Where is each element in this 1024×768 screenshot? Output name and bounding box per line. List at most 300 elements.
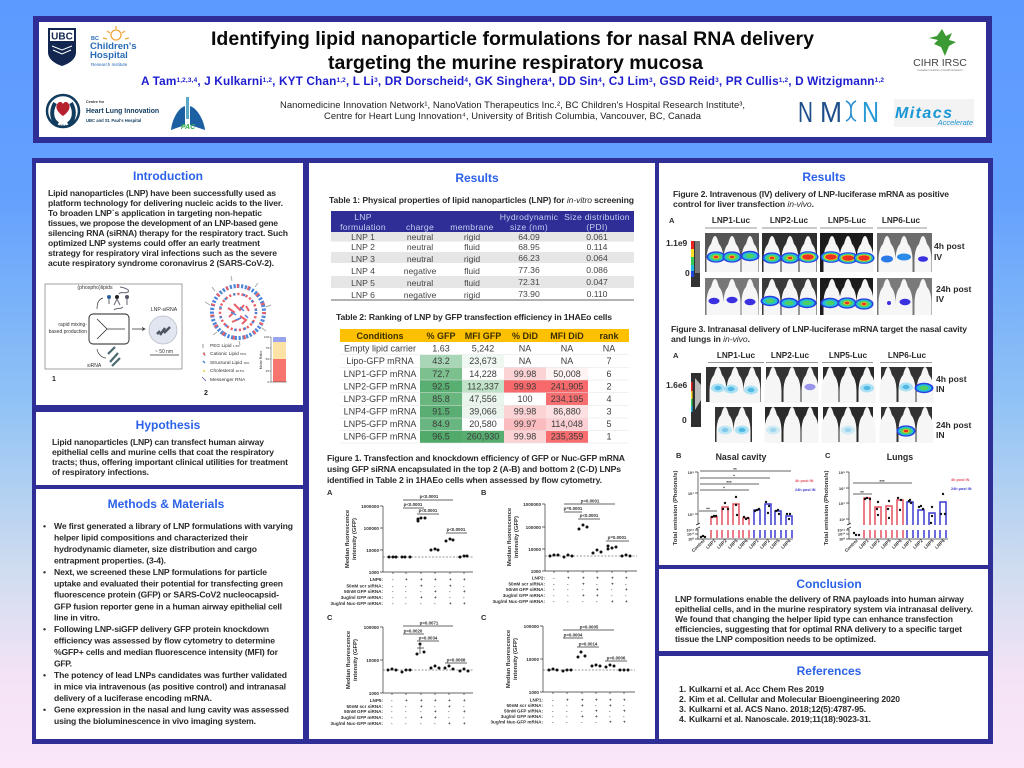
text: reference list: Kim et al. Cellular and Molecular Bioengineering 2020: [689, 694, 900, 704]
chart: nasal cavity: B: [676, 451, 682, 460]
chart: figure 1 B: 50nM GFP siRNA:: [506, 587, 545, 592]
table 1: fluid: [464, 278, 480, 288]
chart: figure 1 C (LNP1): 3ug/ml GFP mRNA:: [501, 714, 543, 719]
text: methods bullets: GFP fusion reporter gene in a human airway epithelial cell: [54, 601, 282, 611]
table 2: 99.93: [514, 382, 536, 392]
table 2: 99.98: [514, 432, 536, 442]
figure 2 bioluminescence images, 4h: [705, 233, 932, 272]
heading: results in vivo: Results: [802, 170, 846, 184]
logo: Heart Lung Innovation: [47, 95, 159, 128]
chart: figure 1 C (LNP1): [481, 613, 635, 724]
chart: figure 1 C (LNP1): p=0.0005: [580, 624, 599, 630]
text: introduction body: platform technology for delivering nucleic acids to the liver.: [48, 198, 283, 208]
text: conclusion body: tissue the LNP composition needs to be optimized.: [675, 634, 876, 644]
table 1: 68.95: [518, 242, 540, 252]
chart: lungs: 10⁵: [839, 501, 845, 506]
chart: figure 1 A: 100000: [364, 526, 379, 531]
table 2: Conditions: [356, 331, 404, 341]
figure 1 caption: Figure 1. Transfection and knockdown efficiency of GFP or Nuc-GFP mRNA: [327, 453, 625, 463]
text: methods bullets: %GFP+ cells and median fluorescence intensity (MFI) for: [54, 647, 279, 657]
chart: figure 1 C (LNP1): 50nM GFP siRNA:: [504, 708, 543, 714]
chart: nasal cavity: LNP5: [727, 538, 739, 550]
table 2: MFI GFP: [465, 331, 501, 341]
table 2: [340, 329, 629, 443]
chart: figure 1 C (LNP1): p=0.0004: [564, 632, 583, 638]
chart: figure 1 C (LNP5): 100000: [364, 625, 379, 630]
logo: CIHR: Canadian Institutes of Health Research: [917, 68, 963, 72]
table 2: 112,337: [467, 382, 499, 392]
table 1: 73.90: [518, 289, 540, 299]
chart: nasal cavity: 4h post IN: [795, 479, 814, 483]
chart: nasal cavity: 10⁷: [688, 491, 694, 496]
text: methods bullets: entrapment properties. (3-4).: [54, 555, 166, 565]
figure 3 time labels: IN: [936, 430, 945, 440]
table 1: fluid: [464, 242, 480, 252]
figure 2 time labels: [934, 241, 971, 304]
table 2: 6: [606, 369, 612, 379]
chart: figure 1 A: ---+-+: [392, 589, 466, 594]
chart: figure 1 C (LNP5): C: [327, 613, 333, 622]
panel: references: [659, 656, 988, 739]
text: methods bullets: delivery of a luciferase encoding mRNA.: [54, 693, 212, 703]
logo: Heart Lung Innovation: Heart Lung Innovation: [86, 108, 159, 115]
chart: nasal cavity: [673, 451, 816, 553]
table 2: 96.5: [432, 432, 450, 442]
figure: LNP structure with composition: 2: [204, 390, 208, 397]
figure 2 labels: [669, 216, 927, 228]
figure 2 labels: LNP6-Luc: [882, 216, 921, 225]
chart: figure 1 B: p=0.0001: [581, 498, 600, 504]
text: reference list: Kulkarni et al. ACS Nano. 2018;12(5):4787-95.: [689, 704, 866, 714]
figure 3 caption: and lungs in in-vivo.: [671, 334, 750, 344]
text: reference list: 4.: [679, 714, 686, 724]
table 2: 100: [517, 394, 533, 404]
chart: nasal cavity: LNP5: [769, 538, 781, 550]
table 2: 50,008: [553, 369, 581, 379]
text: conclusion body: [675, 594, 973, 644]
table 1: LNP: [354, 212, 372, 222]
text: methods bullets: uptake and evaluated their potential for transfecting green: [54, 578, 283, 588]
text: reference list: [679, 684, 900, 724]
chart: lungs: C: [825, 451, 831, 460]
chart: figure 1 A: 3ug/ml GFP mRNA:: [341, 595, 383, 600]
colour scale: figure 2: 1.1e9: [666, 238, 688, 248]
text: methods bullets: We first generated a library of LNP formulations with varying: [54, 521, 293, 531]
chart: figure 1 C (LNP1): p=0.0006: [607, 656, 626, 660]
figure: LNP structure with composition: 25: [266, 369, 269, 373]
chart: figure 1 B: B: [481, 488, 487, 497]
chart: figure 1 C (LNP1): 100000: [524, 624, 539, 629]
logo: Heart Lung Innovation: HLI: [60, 123, 66, 128]
title: [211, 28, 814, 74]
chart: figure 1 A: [327, 488, 473, 606]
chart: nasal cavity: 10¹⁴: [686, 528, 694, 532]
table 2: 72.7: [432, 369, 450, 379]
authors: A Tam1,2,3,4, J Kulkarni1,2, KYT Chan1,2, L Li3, DR Dorscheid4, GK Singhera4, DD Sin4, CJ Lim3, GSD Reid3, PR Cullis1,2, D Witzigmann1,2: [141, 74, 884, 88]
table 2: 260,930: [467, 432, 499, 442]
table 2: 234,195: [551, 394, 583, 404]
chart: figure 1 C (LNP5): 3ug/ml Nuc-GFP mRNA:: [330, 721, 383, 726]
chart: figure 1 C (LNP1): --++--: [552, 714, 625, 719]
table 2: 4: [606, 394, 612, 404]
logo: PAC lungs: PAC: [181, 124, 196, 131]
text: hypothesis body: [52, 437, 288, 477]
table 2 title: Table 2: Ranking of LNP by GFP transfection efficiency in 1HAEo cells: [336, 312, 612, 322]
figure 1 caption: identified in Table 2 in 1HAEo cells when assessed by flow cytometry.: [327, 475, 602, 485]
table 1: Hydrodynamic: [500, 212, 559, 222]
text: conclusion body: We found that changing the helper lipid type can enhance transfection: [675, 614, 953, 624]
logo: Heart Lung Innovation: UBC and St. Paul's Hospital: [86, 118, 141, 123]
chart: figure 1 C (LNP5): p=0.0020: [404, 628, 423, 634]
text: introduction body: silencing RNA (siRNA) therapy for the respiratory tract. Such: [48, 228, 288, 238]
chart: figure 1 C (LNP5): [327, 613, 473, 726]
figure 3 time labels: IN: [936, 384, 945, 394]
chart: lungs: [824, 451, 972, 553]
figure 3 time labels: 24h post: [936, 420, 971, 430]
text: methods bullets: hydrodynamic diameter, size distribution and cargo: [54, 544, 257, 554]
chart: figure 1 A: --++--: [392, 595, 465, 600]
logo: BC Children's Hospital: Children's: [90, 41, 137, 52]
logo: NMIN: N: [798, 97, 813, 129]
text: hypothesis body: of respiratory infections.: [52, 467, 149, 477]
text: methods bullets: line in vitro.: [54, 613, 100, 623]
chart: lungs: Control: [844, 538, 859, 553]
chart: figure 1 C (LNP1): ----++: [552, 720, 626, 724]
chart: figure 1 C (LNP1): -+++++: [552, 698, 626, 702]
table 2: 20,580: [469, 419, 497, 429]
table 1: negative: [404, 266, 436, 276]
logo: NMIN: N: [862, 97, 879, 129]
panel: results in vivo: [659, 163, 988, 565]
chart: figure 1 A: intensity (GFP): [352, 518, 358, 560]
chart: lungs: LNP6: [934, 538, 946, 550]
colour scale: figure 3: 1.6e6: [666, 380, 688, 390]
table 1: 77.36: [518, 265, 540, 275]
chart: figure 1 B: 1000000: [523, 502, 541, 507]
table 2: 114,048: [551, 419, 583, 429]
panel: hypothesis: [36, 412, 303, 485]
logo: Mitacs Accelerate: Accelerate: [937, 118, 973, 127]
table 2: 99.97: [514, 419, 536, 429]
chart: lungs: 10⁹: [839, 470, 845, 475]
chart: figure 1 B: [481, 488, 637, 604]
chart: figure 1 C (LNP5): intensity (GFP): [353, 639, 359, 681]
chart: figure 1 B: p<0.0001: [580, 513, 599, 518]
chart: figure 1 C (LNP5): 50nM GFP siRNA:: [344, 709, 383, 714]
table 1: charge: [406, 222, 434, 232]
chart: figure 1 B: 50nM scr siRNA:: [508, 582, 545, 586]
heading: results: Results: [455, 171, 499, 185]
chart: figure 1 B: ----++: [553, 599, 628, 604]
table 2: 85.8: [432, 394, 450, 404]
logo: PAC lungs: [171, 97, 205, 131]
chart: nasal cavity: LNP2: [716, 538, 728, 550]
chart: nasal cavity: **: [733, 467, 737, 472]
figure 2 labels: LNP2-Luc: [770, 216, 809, 225]
logo: Mitacs Accelerate: [894, 99, 974, 127]
table 1: neutral: [407, 232, 433, 242]
logo: Heart Lung Innovation: Centre for: [86, 100, 105, 104]
figure: LNP production schematic: rapid mixing-: [58, 322, 87, 328]
table 1: LNP 1: [351, 232, 375, 242]
logo: UBC: UBC: [51, 32, 73, 42]
chart: nasal cavity: 10¹²: [687, 532, 695, 536]
chart: figure 1 C (LNP5): 1000: [369, 691, 379, 696]
table 2: % DiD: [512, 331, 538, 341]
table 1 title: Table 1: Physical properties of lipid nanoparticles (LNP) for in-vitro screening: [329, 195, 634, 205]
table 2: Empty lipid carrier: [344, 344, 416, 354]
figure: LNP structure with composition: Cholesterol 38.5%: [210, 368, 244, 374]
figure: LNP structure with composition: 50: [266, 357, 269, 361]
table 2: 7: [606, 356, 612, 366]
text: methods bullets: [43, 521, 293, 726]
figure: LNP production schematic: (phospho)lipids: [77, 285, 113, 291]
text: introduction body: strategy for respiratory viral infections such as the severe: [48, 248, 277, 258]
text: reference list: 2.: [679, 694, 686, 704]
chart: figure 1 C (LNP5): p=0.0071: [420, 620, 439, 626]
table 2: LNP2-GFP mRNA: [344, 382, 416, 392]
chart: lungs: LNP1: [858, 538, 870, 550]
chart: figure 1 B: 1000: [531, 569, 541, 574]
chart: figure 1 C (LNP5): Median fluorescence: [346, 630, 352, 689]
chart: lungs: 10³: [839, 517, 846, 522]
table 2: 241,905: [551, 382, 583, 392]
chart: lungs: LNP5: [880, 538, 892, 550]
chart: lungs: 24h post IN: [951, 487, 972, 491]
table 1: (PDI): [586, 222, 608, 232]
chart: figure 1 A: 50nM GFP siRNA:: [344, 589, 383, 594]
table 1: Size distribution: [564, 212, 630, 222]
text: conclusion body: efficiencies, suggesting that for optimal RNA delivery to a specific target: [675, 624, 962, 634]
text: methods bullets: •: [43, 705, 46, 715]
chart: nasal cavity: 24h post IN: [795, 488, 816, 492]
chart: figure 1 C (LNP5): 3ug/ml GFP mRNA:: [341, 715, 383, 720]
chart: figure 1 B: p=0.0001: [564, 506, 583, 511]
chart: figure 1 A: 3ug/ml Nuc-GFP mRNA:: [330, 601, 383, 606]
text: methods bullets: using the bioluminescence in vivo imaging system.: [54, 716, 256, 726]
text: methods bullets: in mice via intravenous (as positive control) and intranasal: [54, 681, 286, 691]
table 1: 0.047: [586, 277, 608, 287]
figure 2 caption: control for liver transfection in-vivo.: [673, 199, 814, 209]
figure: LNP structure with composition: [202, 276, 287, 397]
chart: figure 1 A: A: [327, 488, 333, 497]
chart: figure 1 B: ---+-+: [553, 587, 628, 592]
logo: BC Children's Hospital: [90, 26, 137, 67]
chart: lungs: LNP2: [912, 538, 924, 550]
table 2: NA: [519, 344, 531, 354]
figure: LNP structure with composition: Cationic Lipid 50%: [210, 351, 246, 357]
table 1: rigid: [464, 290, 480, 300]
table 2: 23,673: [469, 356, 497, 366]
chart: figure 1 A: --+-+-: [392, 584, 465, 588]
table 2: MFI DiD: [550, 331, 584, 341]
affiliations: Centre for Heart Lung Innovation⁴, University of British Columbia, Vancouver, BC, Canada: [324, 110, 702, 121]
chart: lungs: 4h post IN: [951, 478, 970, 482]
colour scale: figure 3: 0: [682, 415, 687, 425]
text: conclusion body: LNP formulations enable the delivery of RNA payloads into human airway: [675, 594, 964, 604]
text: methods bullets: •: [43, 670, 46, 680]
figure: LNP structure with composition: PEG Lipid 1.5%: [210, 343, 240, 349]
figure 2 labels: LNP1-Luc: [712, 216, 751, 225]
chart: nasal cavity: Control: [691, 538, 706, 553]
figure 2 caption: [673, 189, 949, 209]
text: methods bullets: •: [43, 624, 46, 634]
chart: nasal cavity: 10⁵: [688, 512, 694, 517]
table 2: 235,359: [551, 432, 583, 442]
chart: lungs: LNP2: [869, 538, 881, 550]
chart: figure 1 C (LNP1): intensity (GFP): [513, 638, 519, 680]
chart: nasal cavity: LNP1: [748, 538, 760, 550]
logo: BC Children's Hospital: Research Institute: [91, 62, 128, 67]
figure 3 caption: Figure 3. Intranasal delivery of LNP-luciferase mRNA target the nasal cavity: [671, 324, 967, 334]
figure 1 caption: using GFP siRNA encapsulated in the top 2 (A-B) and bottom 2 (C-D) LNPs: [327, 464, 621, 474]
table 2: 84.9: [432, 419, 450, 429]
table 2: 86,880: [553, 406, 581, 416]
chart: figure 1 C (LNP5): p=0.0034: [419, 636, 438, 640]
colour scale: figure 3: [666, 373, 701, 427]
logo: BC Children's Hospital: BC: [91, 36, 99, 42]
figure 2 time labels: IV: [934, 252, 942, 262]
logo: BC Children's Hospital: Hospital: [90, 50, 128, 61]
chart: figure 1 B: --++--: [553, 593, 627, 598]
chart: figure 1 C (LNP1): Median fluorescence: [506, 629, 512, 688]
text: introduction body: Lipid nanoparticles (LNP) have been successfully used as: [48, 188, 276, 198]
text: reference list: 1.: [679, 684, 686, 694]
table 1: LNP 2: [351, 242, 375, 252]
chart: figure 1 C (LNP5): --++--: [391, 715, 465, 720]
chart: figure 1 A: Median fluorescence: [345, 509, 351, 568]
table 2: LNP1-GFP mRNA: [344, 369, 416, 379]
chart: lungs: 10¹⁴: [837, 528, 845, 532]
chart: figure 1 C (LNP5): ---+-+: [391, 709, 466, 714]
table 1: rigid: [464, 254, 480, 264]
table 2: 5: [606, 419, 612, 429]
figure 2 time labels: IV: [936, 294, 944, 304]
table 1: LNP 3: [351, 254, 375, 264]
figure: LNP structure with composition: 100: [264, 335, 269, 339]
panel: results tables and figure 1: [309, 163, 655, 739]
chart: nasal cavity: *: [723, 486, 725, 490]
chart: figure 1 A: 50nM scr siRNA:: [346, 584, 383, 588]
chart: lungs: **: [860, 490, 864, 495]
chart: lungs: 10⁰: [839, 536, 845, 542]
table 1: 66.23: [518, 253, 540, 263]
table 2: 99.98: [514, 406, 536, 416]
chart: figure 1 C (LNP1): 1000: [529, 690, 539, 695]
table 1: size (nm): [510, 222, 548, 232]
figure 2 labels: A: [669, 216, 675, 225]
chart: nasal cavity: LNP1: [705, 538, 717, 550]
panel: header: [33, 16, 992, 143]
table 1: neutral: [407, 254, 433, 264]
text: hypothesis body: Lipid nanoparticles (LNP) can transfect human airway: [52, 437, 264, 447]
chart: figure 1 B: p=0.0001: [608, 535, 627, 540]
text: introduction body: [48, 188, 288, 268]
table 2: 5,242: [472, 344, 494, 354]
text: introduction body: To broaden LNP`s application in targeting non-hepatic: [48, 208, 262, 218]
chart: figure 1 C (LNP1): p=0.0014: [579, 642, 598, 646]
table 2: 3: [606, 406, 612, 416]
text: hypothesis body: tracts; thus, offering important clinical utilities for treatment: [52, 457, 288, 467]
figure: LNP production schematic: 1: [52, 376, 56, 383]
table 2: 91.5: [432, 406, 450, 416]
figure 3 labels: LNP6-Luc: [888, 351, 927, 360]
chart: figure 1 A: 1000000: [361, 504, 379, 509]
figure 2 time labels: 24h post: [936, 284, 971, 294]
text: methods bullets: efficiency was assessed by flow cytometry to determine: [54, 636, 275, 646]
text: methods bullets: •: [43, 567, 46, 577]
table 2: NA: [561, 344, 573, 354]
chart: nasal cavity: *: [733, 474, 735, 478]
figure: LNP structure with composition: Messenger RNA: [210, 377, 246, 383]
chart: lungs: LNP5: [923, 538, 935, 550]
figure: LNP production schematic: LNP-siRNA: [151, 307, 178, 313]
chart: lungs: 10⁷: [839, 486, 845, 491]
table 1: membrane: [450, 222, 494, 232]
chart: figure 1 C (LNP1): --+-+-: [552, 703, 625, 708]
figure: LNP production schematic: [45, 284, 182, 383]
text: methods bullets: Gene expression in the nasal and lung cavity was assessed: [54, 705, 289, 715]
chart: nasal cavity: LNP6: [737, 538, 749, 550]
table 1: 0.086: [586, 265, 608, 275]
table 2: NA: [603, 344, 615, 354]
logo: CIHR: [913, 29, 967, 72]
table 2: NA: [519, 356, 531, 366]
table 1: neutral: [407, 242, 433, 252]
affiliations: [280, 99, 745, 121]
table 1: rigid: [464, 232, 480, 242]
figure: LNP structure with composition: 0: [267, 380, 269, 384]
chart: lungs: Total emission (Photons/s): [824, 471, 830, 545]
chart: figure 1 C (LNP1): ---+-+: [552, 708, 626, 714]
chart: figure 1 A: p<0.0001: [447, 527, 466, 532]
chart: figure 1 C (LNP5): -+++++: [391, 698, 466, 703]
heading: conclusion: Conclusion: [796, 577, 862, 591]
figure 2 time labels: 4h post: [934, 241, 965, 251]
table 2: 99.98: [514, 369, 536, 379]
table 2: NA: [561, 356, 573, 366]
text: introduction body: acute respiratory syndrome coronavirus 2 (SARS-CoV-2).: [48, 258, 274, 268]
table 2: LNP5-GFP mRNA: [344, 419, 416, 429]
affiliations: Nanomedicine Innovation Network¹, NanoVation Therapeutics Inc.², BC Children's Hospital Research Institute³,: [280, 99, 745, 110]
text: methods bullets: helper lipid compositions and characterized their: [54, 532, 249, 542]
table 1: 0.064: [586, 253, 608, 263]
chart: figure 1 B: LNP2:: [532, 576, 545, 580]
colour scale: figure 2: 0: [685, 268, 690, 278]
chart: lungs: LNP6: [891, 538, 903, 550]
chart: nasal cavity: **: [706, 506, 710, 512]
chart: figure 1 B: intensity (GFP): [514, 516, 520, 558]
text: methods bullets: Next, we screened these LNP formulations for particle: [54, 567, 267, 577]
logo: NMIN: M: [820, 97, 842, 129]
chart: nasal cavity: Nasal cavity: [716, 452, 767, 462]
heading: introduction: Introduction: [133, 169, 203, 183]
chart: figure 1 C (LNP5): LNP5:: [370, 698, 383, 703]
logo: CIHR: CIHR IRSC: [913, 57, 967, 69]
figure 3 time labels: 4h post: [936, 374, 967, 384]
chart: figure 1 B: 3ug/ml Nuc-GFP mRNA:: [492, 599, 545, 604]
figure 2 caption: Figure 2. Intravenous (IV) delivery of LNP-luciferase mRNA as positive: [673, 189, 949, 199]
chart: figure 1 A: -+++++: [392, 577, 466, 582]
chart: figure 1 C (LNP1): C: [481, 613, 487, 622]
text: methods bullets: fluorescence protein (GFP) or SARS-CoV2 nucleocapsid-: [54, 590, 279, 600]
panel: methods and materials: [36, 489, 303, 739]
table 2: % GFP: [426, 331, 456, 341]
chart: figure 1 B: --+-+-: [553, 582, 627, 586]
figure 3 bioluminescence images, 4h: [706, 367, 934, 403]
figure 2 bioluminescence images, 24h: [705, 278, 932, 315]
chart: figure 1 C (LNP1): 3ug/ml Nuc-GFP mRNA:: [490, 720, 543, 724]
